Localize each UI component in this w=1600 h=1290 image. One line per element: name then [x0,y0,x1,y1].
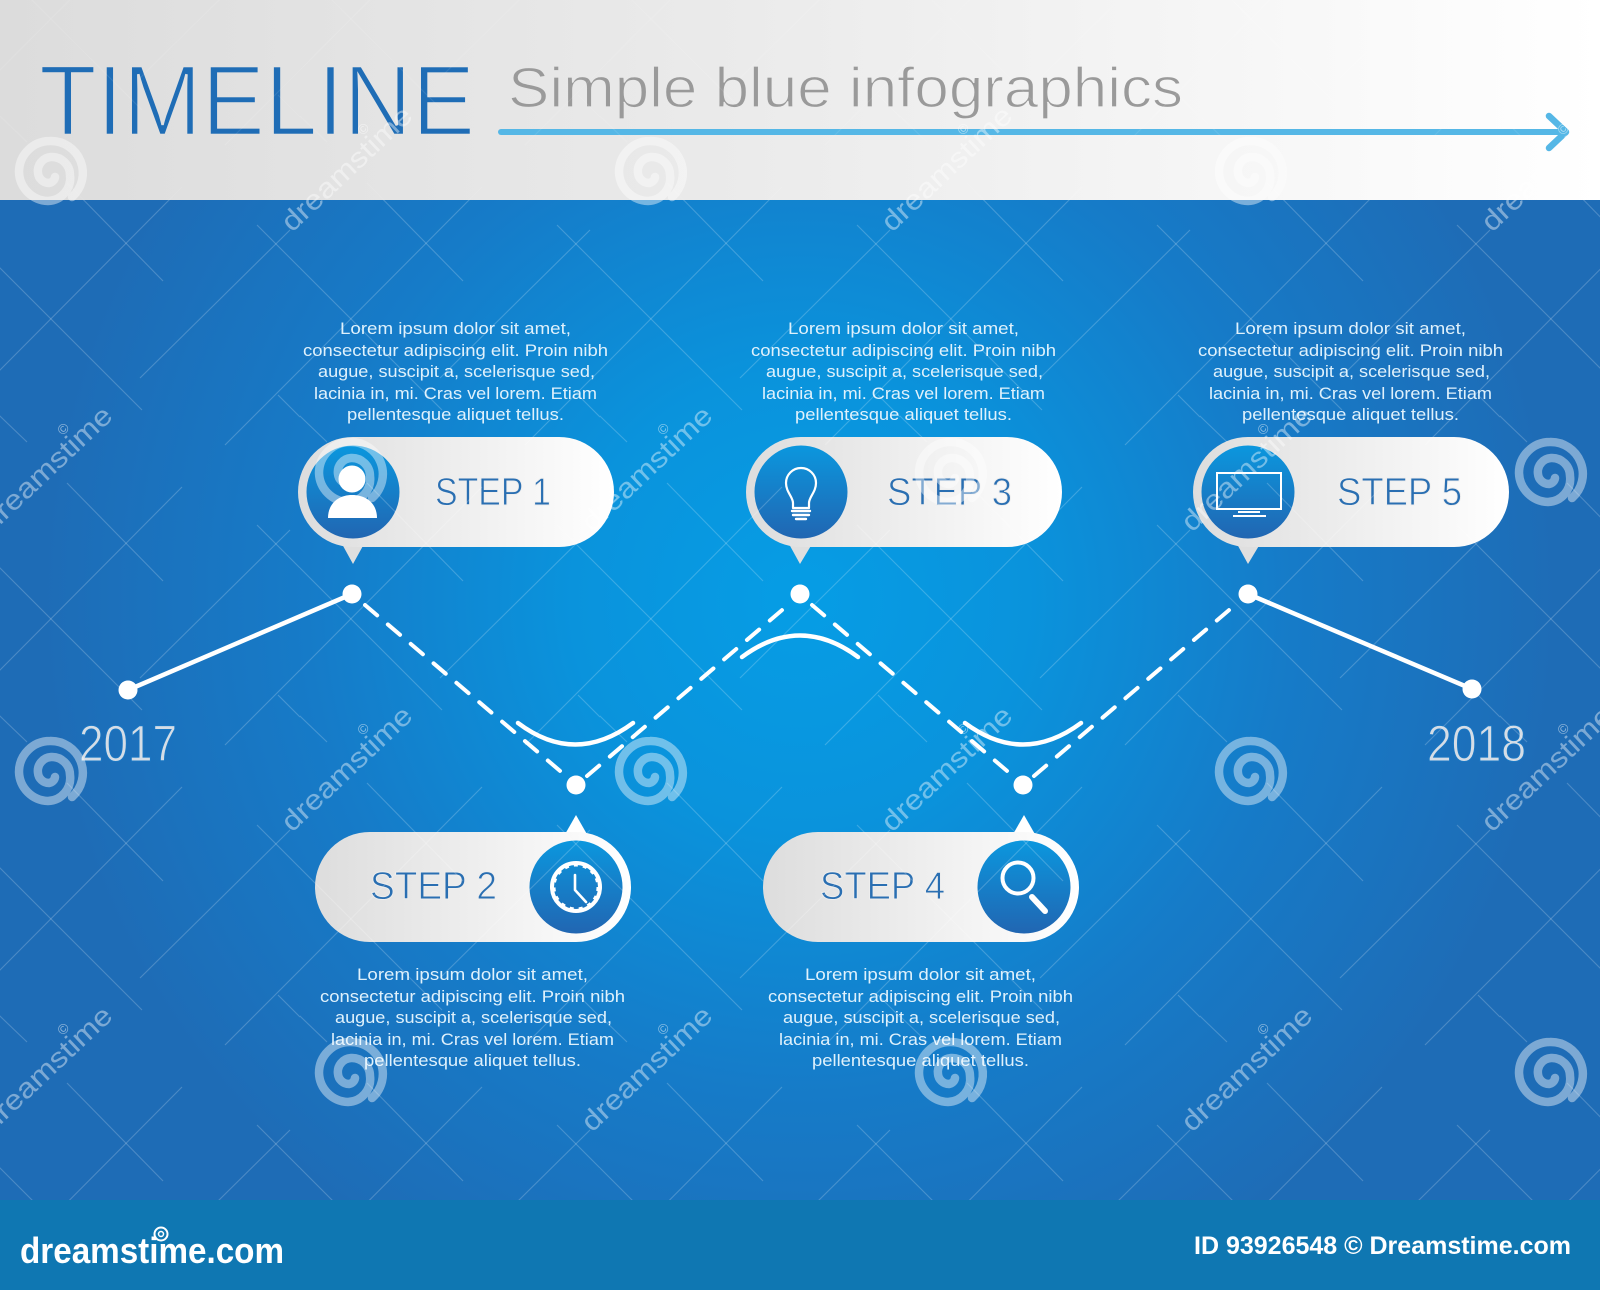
footer bar [0,1200,1600,1290]
watermark text: © [54,419,73,438]
pill 1: STEP 1 [435,471,551,514]
description 3: Lorem ipsum dolor sit amet, [788,320,1019,338]
timeline path [128,594,1472,776]
pill 5 [1193,437,1509,564]
icon: person [328,466,377,518]
description 1: augue, suscipit a, scelerisque sed, [318,363,595,381]
description 4: augue, suscipit a, scelerisque sed, [783,1009,1060,1027]
title: TIMELINE [39,45,475,157]
icon: clock [552,863,600,911]
description 2: augue, suscipit a, scelerisque sed, [335,1009,612,1027]
description 2: Lorem ipsum dolor sit amet, [357,966,588,984]
pill 4: STEP 4 [820,865,945,908]
watermark spirals [19,141,1583,1102]
watermark text: dreamstime [575,1000,718,1137]
description 4: Lorem ipsum dolor sit amet, [805,966,1036,984]
year label 2018: 2018 [1427,715,1526,772]
step 3 group [746,320,1062,564]
solid start segment [128,594,352,690]
watermark text: dreamstime [275,700,418,837]
pill 1 [298,437,614,564]
arrow [501,116,1566,148]
description 5 [1198,320,1503,424]
footer logo: dreamstime.com [20,1230,284,1271]
watermark text: © [54,1019,73,1038]
description 3 [751,320,1056,424]
step 4 group [763,815,1079,1070]
description 4: pellentesque aliquet tellus. [812,1052,1029,1070]
description 4 [768,966,1073,1070]
description 1 [303,320,608,424]
description 1: consectetur adipiscing elit. Proin nibh [303,342,608,360]
watermark text: © [354,719,373,738]
subtitle: Simple blue infographics [508,56,1183,120]
description 5: augue, suscipit a, scelerisque sed, [1213,363,1490,381]
watermark text: © [654,419,673,438]
watermark text: © [354,119,373,138]
description 5: consectetur adipiscing elit. Proin nibh [1198,342,1503,360]
watermark text: © [654,1019,673,1038]
dashed zigzag [365,605,1235,776]
watermark text: dreamstime [875,100,1018,237]
pill 5: STEP 5 [1337,471,1462,514]
watermark text: © [954,719,973,738]
watermark text: © [1254,1019,1273,1038]
watermark text: dreamstime [875,700,1018,837]
icon: magnifier [1002,862,1045,911]
description 5: pellentesque aliquet tellus. [1242,406,1459,424]
description 3: lacinia in, mi. Cras vel lorem. Etiam [762,385,1045,403]
description 1: pellentesque aliquet tellus. [347,406,564,424]
icon: monitor [1217,473,1281,516]
footer id text: ID 93926548 © Dreamstime.com [1194,1232,1571,1260]
watermark text: © [1554,719,1573,738]
description 2 [320,966,625,1070]
pill 3 [746,437,1062,564]
solid end segment [1248,594,1472,689]
watermark text: dreamstime [275,100,418,237]
description 1: Lorem ipsum dolor sit amet, [340,320,571,338]
watermark text: dreamstime [575,400,718,537]
description 3: augue, suscipit a, scelerisque sed, [766,363,1043,381]
description 5: Lorem ipsum dolor sit amet, [1235,320,1466,338]
description 2: pellentesque aliquet tellus. [364,1052,581,1070]
watermark text: dreamstime [1175,400,1318,537]
description 3: consectetur adipiscing elit. Proin nibh [751,342,1056,360]
pill 3: STEP 3 [887,471,1012,514]
step 1 group [298,320,614,564]
step 2 group [315,815,631,1070]
description 2: lacinia in, mi. Cras vel lorem. Etiam [331,1031,614,1049]
year label 2017: 2017 [79,715,177,772]
watermark text: dreamstime [1175,1000,1318,1137]
watermark text: © [1254,419,1273,438]
description 4: lacinia in, mi. Cras vel lorem. Etiam [779,1031,1062,1049]
pill 2 [315,815,631,942]
pill 4 [763,815,1079,942]
watermark text: © [1554,119,1573,138]
description 4: consectetur adipiscing elit. Proin nibh [768,988,1073,1006]
description 3: pellentesque aliquet tellus. [795,406,1012,424]
header band [0,0,1600,200]
step 5 group [1193,320,1509,564]
watermark text: © [954,119,973,138]
watermark text: dreamstime [1475,100,1600,237]
description 1: lacinia in, mi. Cras vel lorem. Etiam [314,385,597,403]
pill 2: STEP 2 [370,865,497,908]
description 5: lacinia in, mi. Cras vel lorem. Etiam [1209,385,1492,403]
timeline nodes [118,584,1482,794]
description 2: consectetur adipiscing elit. Proin nibh [320,988,625,1006]
connector arcs [518,636,1081,744]
watermark text: dreamstime [1475,700,1600,837]
icon: light bulb [786,468,816,519]
